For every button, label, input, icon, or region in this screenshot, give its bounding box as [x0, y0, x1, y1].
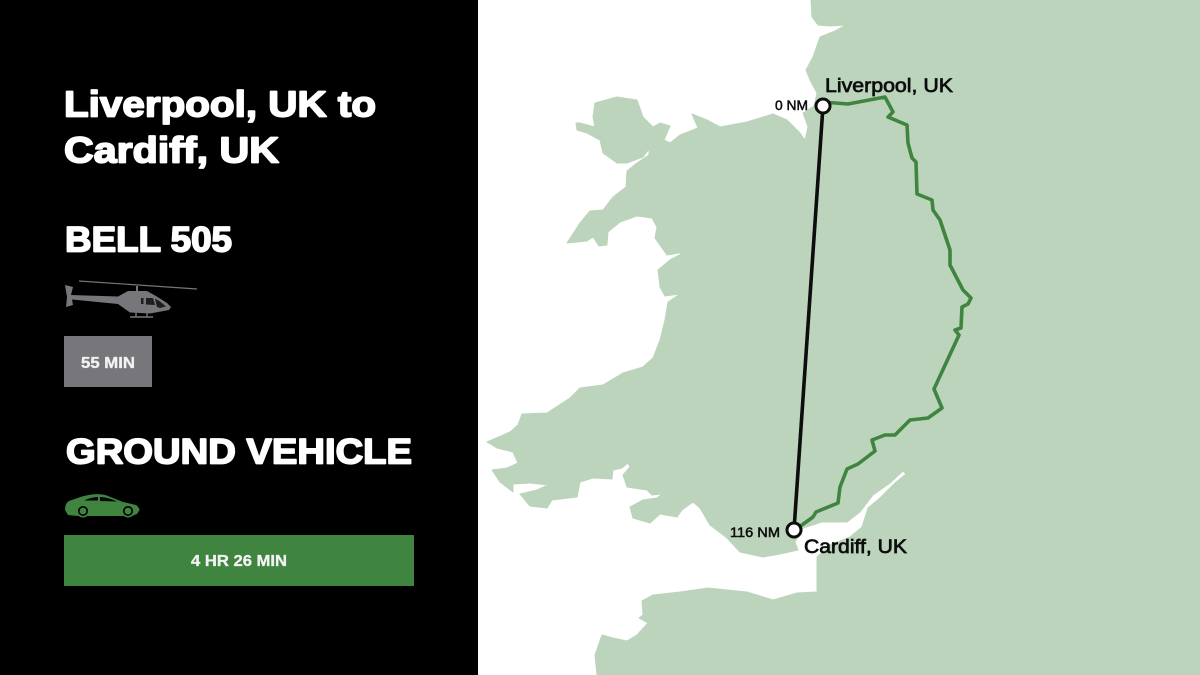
title: Cardiff, UK	[64, 130, 280, 170]
label: 0 NM: 0 NM	[775, 98, 808, 113]
land mass	[487, 0, 1200, 675]
bar: helicopter time: 55 MIN	[81, 355, 135, 372]
helicopter direct route line	[794, 106, 823, 530]
heading: Ground Vehicle: GROUND VEHICLE	[66, 432, 412, 472]
info panel	[0, 0, 478, 675]
label: Cardiff, UK: Cardiff, UK	[804, 537, 907, 558]
icon: car	[65, 494, 140, 518]
ground route line	[795, 97, 971, 530]
title: Liverpool, UK to	[64, 84, 376, 124]
bar: ground vehicle time: 4 HR 26 MIN	[191, 553, 287, 570]
map panel	[478, 0, 1200, 675]
marker: Liverpool	[816, 99, 830, 113]
marker: Cardiff	[787, 523, 801, 537]
label: Liverpool, UK: Liverpool, UK	[825, 76, 953, 97]
icon: helicopter	[65, 281, 197, 317]
heading: Bell 505: BELL 505	[65, 220, 232, 260]
title	[64, 84, 376, 170]
bar: ground vehicle time	[64, 535, 414, 586]
label: 116 NM: 116 NM	[730, 525, 780, 540]
bar: helicopter time	[64, 336, 152, 387]
